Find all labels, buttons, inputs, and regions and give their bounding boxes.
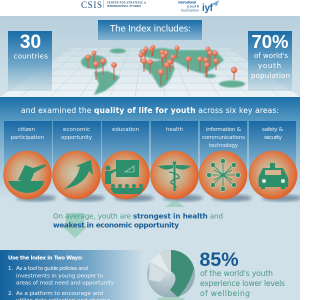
stat box: 30 countries: countries — [14, 52, 48, 60]
stat box: 30 countries — [8, 31, 52, 91]
icon: globe with 85% slice — [147, 250, 195, 300]
panel: use the index in two ways: As a platform to encourage and — [16, 291, 103, 297]
blue band — [0, 97, 300, 197]
heading box: the index includes: The Index includes: — [109, 24, 191, 34]
CSIS logo: CSIS — [81, 0, 102, 10]
stat: 85% lower wellbeing: 85% — [200, 249, 239, 271]
panel: information & communications technology — [199, 121, 252, 202]
header logos — [0, 0, 300, 16]
chevron up: strongest — [165, 200, 185, 207]
panel: use the index in two ways: 2. — [8, 291, 14, 297]
stat: 85% lower wellbeing — [200, 249, 285, 298]
panel: economic opportunity — [52, 121, 105, 202]
pins — [88, 46, 234, 85]
panel: use the index in two ways: Use the Index in Two Ways: — [8, 256, 83, 262]
panel: use the index in two ways: As a tool to guide policies and — [16, 266, 88, 272]
panel: use the index in two ways: 1. — [8, 266, 14, 272]
panel: information & communications technology: information & — [206, 127, 242, 133]
IYF logo: youth — [187, 4, 199, 8]
stat box: 70% of world's youth population: of world's — [254, 52, 288, 60]
CSIS logo: INTERNATIONAL STUDIES — [107, 5, 141, 8]
stat: 85% lower wellbeing: experience lower levels — [200, 279, 285, 288]
CSIS logo — [81, 0, 146, 10]
panel: use the index in two ways: investments in young people to — [16, 273, 104, 279]
stat box: 70% of world's youth population: 70% — [251, 31, 289, 52]
stat box: 70% of world's youth population — [248, 31, 292, 91]
panel: health — [150, 121, 203, 202]
stat box: 30 countries: 30 — [20, 32, 41, 53]
panel: citizen participation: citizen — [18, 127, 36, 133]
stat box: 70% of world's youth population: population — [251, 72, 290, 80]
icon: teacher and blackboard — [105, 160, 144, 194]
icon: caduceus — [158, 161, 191, 191]
panel: use the index in two ways — [0, 250, 144, 300]
heading box: the index includes — [98, 20, 202, 40]
CSIS logo: CENTER FOR STRATEGIC & — [107, 2, 146, 4]
IYF logo: foundation — [181, 8, 199, 12]
panel: safety & security: safety & — [262, 127, 284, 133]
heading: six key areas: and examined the quality of life for youth across six key areas: — [21, 106, 279, 115]
panel: education — [101, 121, 154, 202]
chevron down: weakest — [62, 213, 88, 238]
panel: information & communications technology: technology — [209, 143, 239, 149]
panel: safety & security — [249, 121, 302, 202]
stat: 85% lower wellbeing: of the world's youth — [200, 269, 273, 278]
panel: citizen participation — [3, 121, 56, 202]
IYF logo: iyf — [202, 3, 214, 14]
text: average findings: On average, youth are strongest in health and — [53, 212, 223, 220]
text: average findings — [53, 212, 223, 230]
icon: network — [206, 158, 240, 192]
IYF logo — [178, 0, 219, 14]
stat box: 70% of world's youth population: youth — [258, 62, 281, 70]
panel: education: education — [112, 127, 140, 133]
icon: ballot box — [8, 164, 46, 193]
IYF logo: international — [178, 0, 196, 4]
panel: economic opportunity: opportunity — [61, 135, 93, 141]
world map with pins — [0, 45, 300, 97]
panel: safety & security: security — [264, 135, 283, 141]
map section background — [0, 16, 300, 97]
stat: 85% lower wellbeing: of wellbeing — [200, 289, 250, 298]
panel: health: health — [166, 127, 184, 133]
panel: information & communications technology: communications — [202, 135, 245, 141]
map plane — [0, 48, 300, 97]
panel: economic opportunity: economic — [63, 127, 90, 133]
continents — [81, 48, 245, 95]
panel: use the index in two ways: areas of most need and opportunity — [16, 281, 115, 287]
icon: police car — [258, 163, 288, 189]
panel: citizen participation: participation — [10, 135, 44, 141]
text: average findings: weakest in economic opportunity — [53, 220, 179, 230]
icon: rising arrow — [64, 160, 93, 189]
